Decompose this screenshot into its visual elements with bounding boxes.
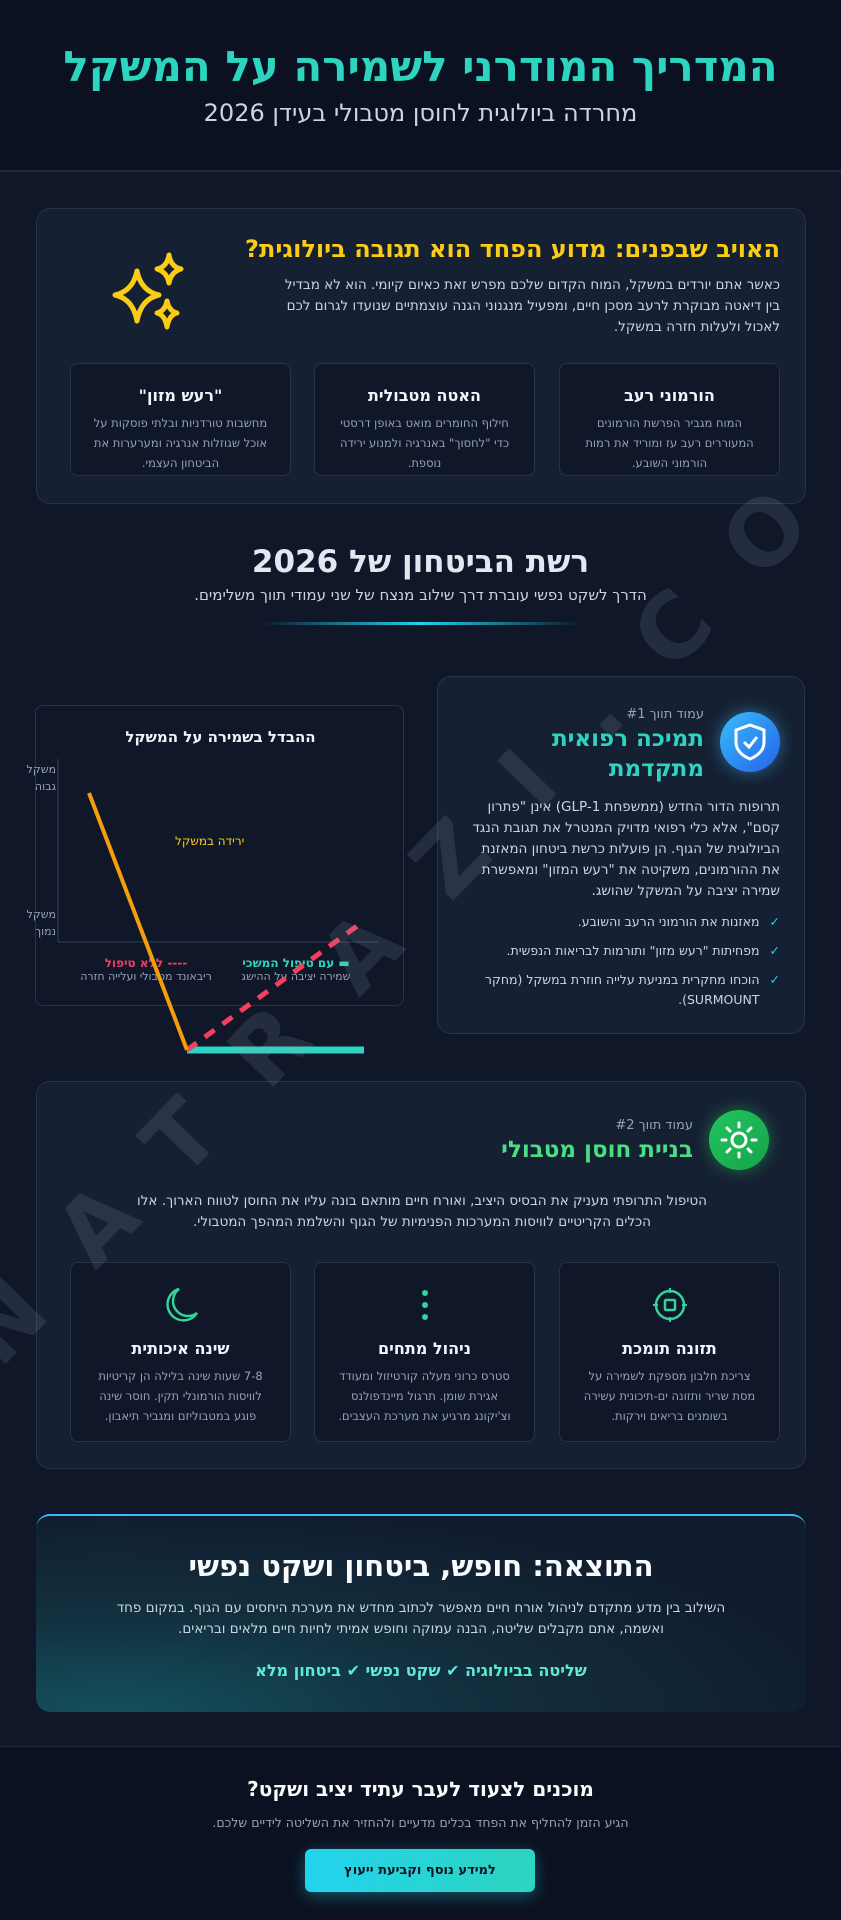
heading: בניית חוסן מטבולי [501, 1137, 693, 1163]
title: המדריך המודרני לשמירה על המשקל [63, 42, 778, 91]
icon: sparkles [112, 252, 184, 330]
card: hunger hormones: המוח מגביר הפרשת הורמונים המעוררים רעב עז ומוריד את רמות הורמוני השובע. [585, 416, 754, 470]
panel: pillar 1 [437, 676, 805, 1034]
checklist: הוכחו מחקרית במניעת עלייה חוזרת במשקל (מחקר SURMOUNT). [485, 972, 760, 1007]
chart lines [58, 759, 378, 1054]
card: metabolic slowdown [314, 363, 535, 476]
heading [501, 1118, 693, 1163]
card: sleep: 7-8 שעות שינה בלילה הן קריטיות לוויסות הורמונלי תקין. חוסר שינה פוגע במטבוליזם ומגביר תיאבון. [98, 1369, 263, 1423]
checklist: ✓ [770, 972, 780, 987]
checklist: מפחיתות "רעש מזון" ותורמות לבריאות הנפשית. [507, 943, 760, 958]
card: metabolic slowdown: חילוף החומרים מואט באופן דרסטי כדי "לחסוך" באנרגיה ולמנוע ירידה נוספת. [340, 416, 509, 470]
legend: with treatment [242, 956, 350, 983]
heading: מתקדמת [609, 756, 704, 782]
checklist: ✓ [770, 943, 780, 958]
card: sleep: שינה איכותית [131, 1339, 230, 1358]
icon: sun [709, 1110, 769, 1170]
text: השילוב בין מדע מתקדם לניהול אורח חיים מאפשר לכתוב מחדש את מערכת היחסים עם הגוף. במקום פחד ואשמה, אתם מקבלים שליטה, הבנה עמוקה וחופש אמיתי לחיות חיים מלאים ובריאים. [117, 1600, 725, 1637]
axis labels: גבוה [35, 780, 56, 793]
chart title: ההבדל בשמירה על המשקל [125, 728, 316, 746]
button: למידע נוסף וקביעת ייעוץ [344, 1863, 496, 1878]
heading: התוצאה: חופש, ביטחון ושקט נפשי [188, 1549, 654, 1583]
intro text: כאשר אתם יורדים במשקל, המוח הקדום שלכם מפרש זאת כאיום קיומי. הוא לא מבדיל בין דיאטה מבוקרת לרעב מסכן חיים, ומפעיל מנגנוני הגנה עוצמתיים שנועדו לגרום לכם לאכול ולעלות חזרה במשקל. [285, 277, 780, 335]
heading: עמוד תווך #2 [615, 1118, 693, 1133]
checklist [485, 914, 780, 1007]
footer text: הגיע הזמן להחליף את הפחד בכלים מדעיים ולהחזיר את השליטה לידיים שלכם. [212, 1815, 629, 1830]
legend: without treatment [80, 956, 212, 983]
button [305, 1849, 535, 1892]
legend: with treatment: שמירה יציבה על ההישג [242, 970, 350, 983]
card: food noise: מחשבות טורדניות ובלתי פוסקות על אוכל שגוזלות אנרגיה ומערערות את הביטחון העצמי. [94, 416, 267, 470]
legend: without treatment: ריבאונד מטבולי ועלייה חזרה [80, 970, 212, 983]
card: food noise [70, 363, 291, 476]
card: stress: סטרס כרוני מעלה קורטיזול ומעודד אגירת שומן. תרגול מיינדפולנס וצ'יקונג מרגיע את מערכת העצבים. [338, 1369, 511, 1423]
card: sleep [70, 1262, 291, 1442]
checklist: ✓ [770, 914, 780, 929]
footer [0, 1746, 841, 1920]
heading: תמיכה רפואית [552, 726, 704, 752]
axis labels [27, 763, 56, 793]
legend: with treatment: ▬ עם טיפול המשכי [242, 956, 350, 970]
card: metabolic slowdown: האטה מטבולית [368, 386, 481, 405]
legend: without treatment: ---- ללא טיפול [105, 956, 187, 970]
card: nutrition [559, 1262, 780, 1442]
footer heading: מוכנים לצעוד לעבר עתיד יציב ושקט? [247, 1777, 594, 1801]
chart card [35, 705, 404, 1006]
section heading: הדרך לשקט נפשי עוברת דרך שילוב מנצח של שני עמודי תווך משלימים. [194, 586, 647, 604]
heading [552, 707, 704, 782]
panel: enemy within [36, 208, 806, 504]
body text: תרופות הדור החדש (ממשפחת GLP-1) אינן "פתרון קסם", אלא כלי רפואי מדויק המנטרל את תגובת הנגד הביולוגית של הגוף. הן פועלות כרשת ביטחון המאזנת את ההורמונים, משקיטה את "רעש המזון" ומאפשרת שמירה יציבה על המשקל שהושג. [472, 799, 780, 899]
subtitle: מחרדה ביולוגית לחוסן מטבולי בעידן 2026 [204, 99, 637, 127]
axis labels: משקל [27, 763, 56, 776]
body text: הטיפול התרופתי מעניק את הבסיס היציב, ואורח חיים מותאם בונה עליו את החוסן לטווח הארוך. אלו הכלים הקריטיים לוויסות המערכות הפנימיות של הגוף והשלמת המהפך המטבולי. [137, 1193, 707, 1230]
heading: האויב שבפנים: מדוע הפחד הוא תגובה ביולוגית? [245, 235, 780, 263]
panel: result [36, 1514, 806, 1712]
card: food noise: "רעש מזון" [139, 386, 222, 405]
card: hunger hormones [559, 363, 780, 476]
icon: shield [720, 712, 780, 772]
section heading: רשת הביטחון של 2026 [252, 544, 589, 580]
card: stress: ניהול מתחים [378, 1339, 471, 1358]
section heading [194, 544, 647, 625]
chart card: משקל [27, 908, 56, 921]
card: hunger hormones: הורמוני רעב [624, 386, 715, 405]
heading: עמוד תווך #1 [626, 707, 704, 722]
chart lines: ירידה במשקל [175, 834, 244, 848]
panel: pillar 2 [36, 1081, 806, 1469]
chart card: נמוך [35, 925, 56, 938]
card: nutrition: צריכת חלבון מספקת לשמירה על מסת שריר ותזונה ים-תיכונית עשירה בשומנים בריאים וירקות. [584, 1369, 755, 1423]
card: nutrition: תזונה תומכת [622, 1339, 717, 1358]
badges: שליטה בביולוגיה ✔ שקט נפשי ✔ ביטחון מלא [255, 1661, 587, 1680]
header [0, 0, 841, 172]
card: stress [314, 1262, 535, 1442]
checklist: מאזנות את הורמוני הרעב והשובע. [578, 914, 760, 929]
